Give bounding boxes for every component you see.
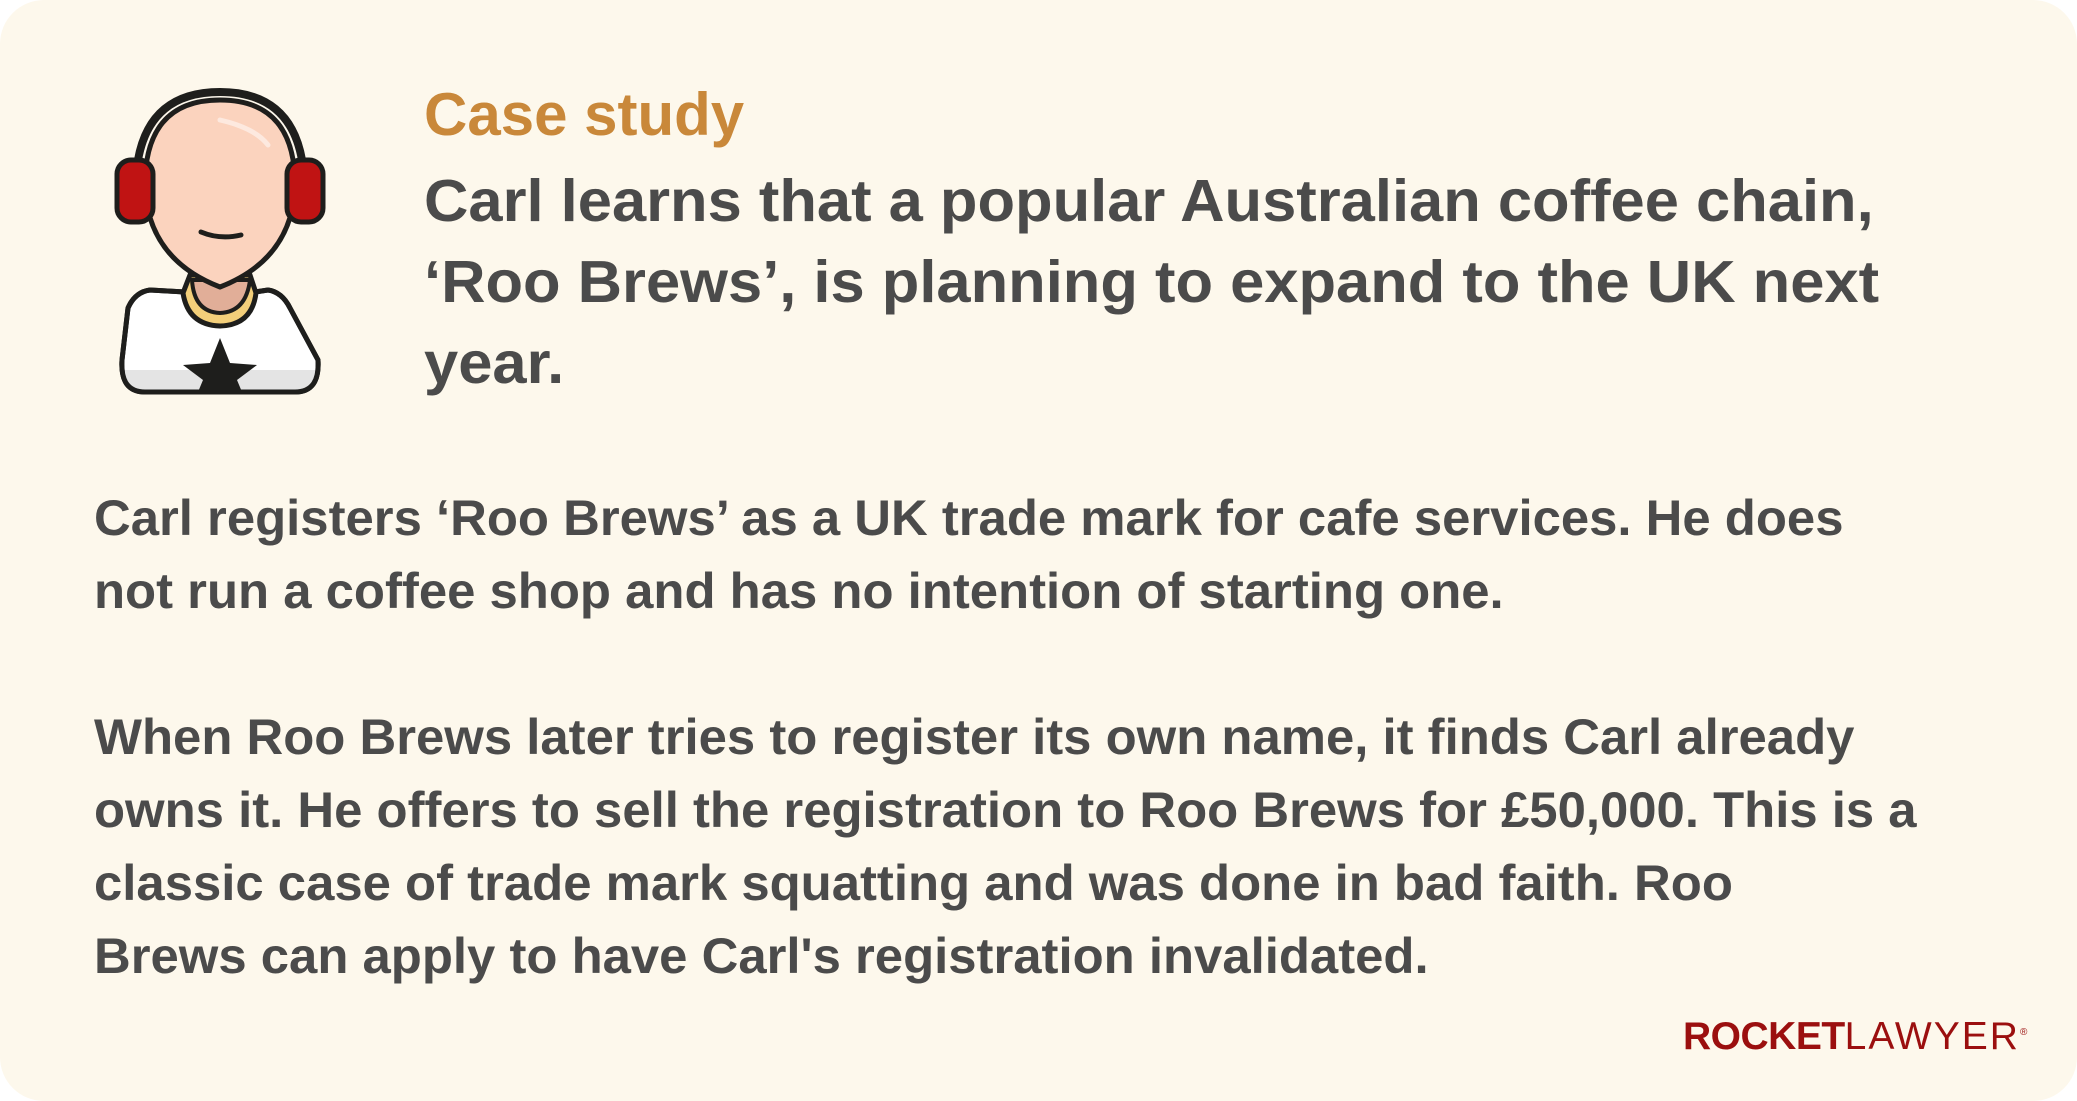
icon: avatar with headphones	[114, 88, 326, 394]
title text: year.	[424, 330, 564, 396]
body paragraph 1	[94, 490, 1843, 619]
body paragraph 2: classic case of trade mark squatting and was done in bad faith. Roo	[94, 855, 1733, 911]
body paragraph 2: Brews can apply to have Carl's registration invalidated.	[94, 928, 1429, 984]
body paragraph 2: When Roo Brews later tries to register its own name, it finds Carl already	[94, 709, 1854, 765]
logo: Rocket Lawyer: ROCKETLAWYER®	[1683, 1015, 2027, 1058]
body paragraph 2	[94, 709, 1917, 984]
title text	[424, 168, 1879, 396]
body paragraph 1: Carl registers ‘Roo Brews’ as a UK trade mark for cafe services. He does	[94, 490, 1843, 546]
body paragraph 2: owns it. He offers to sell the registration to Roo Brews for £50,000. This is a	[94, 782, 1917, 838]
title text: ‘Roo Brews’, is planning to expand to the UK next	[424, 249, 1879, 315]
title text: Carl learns that a popular Australian coffee chain,	[424, 168, 1874, 234]
body paragraph 1: not run a coffee shop and has no intention of starting one.	[94, 563, 1504, 619]
heading: Case study: Case study	[424, 81, 744, 148]
